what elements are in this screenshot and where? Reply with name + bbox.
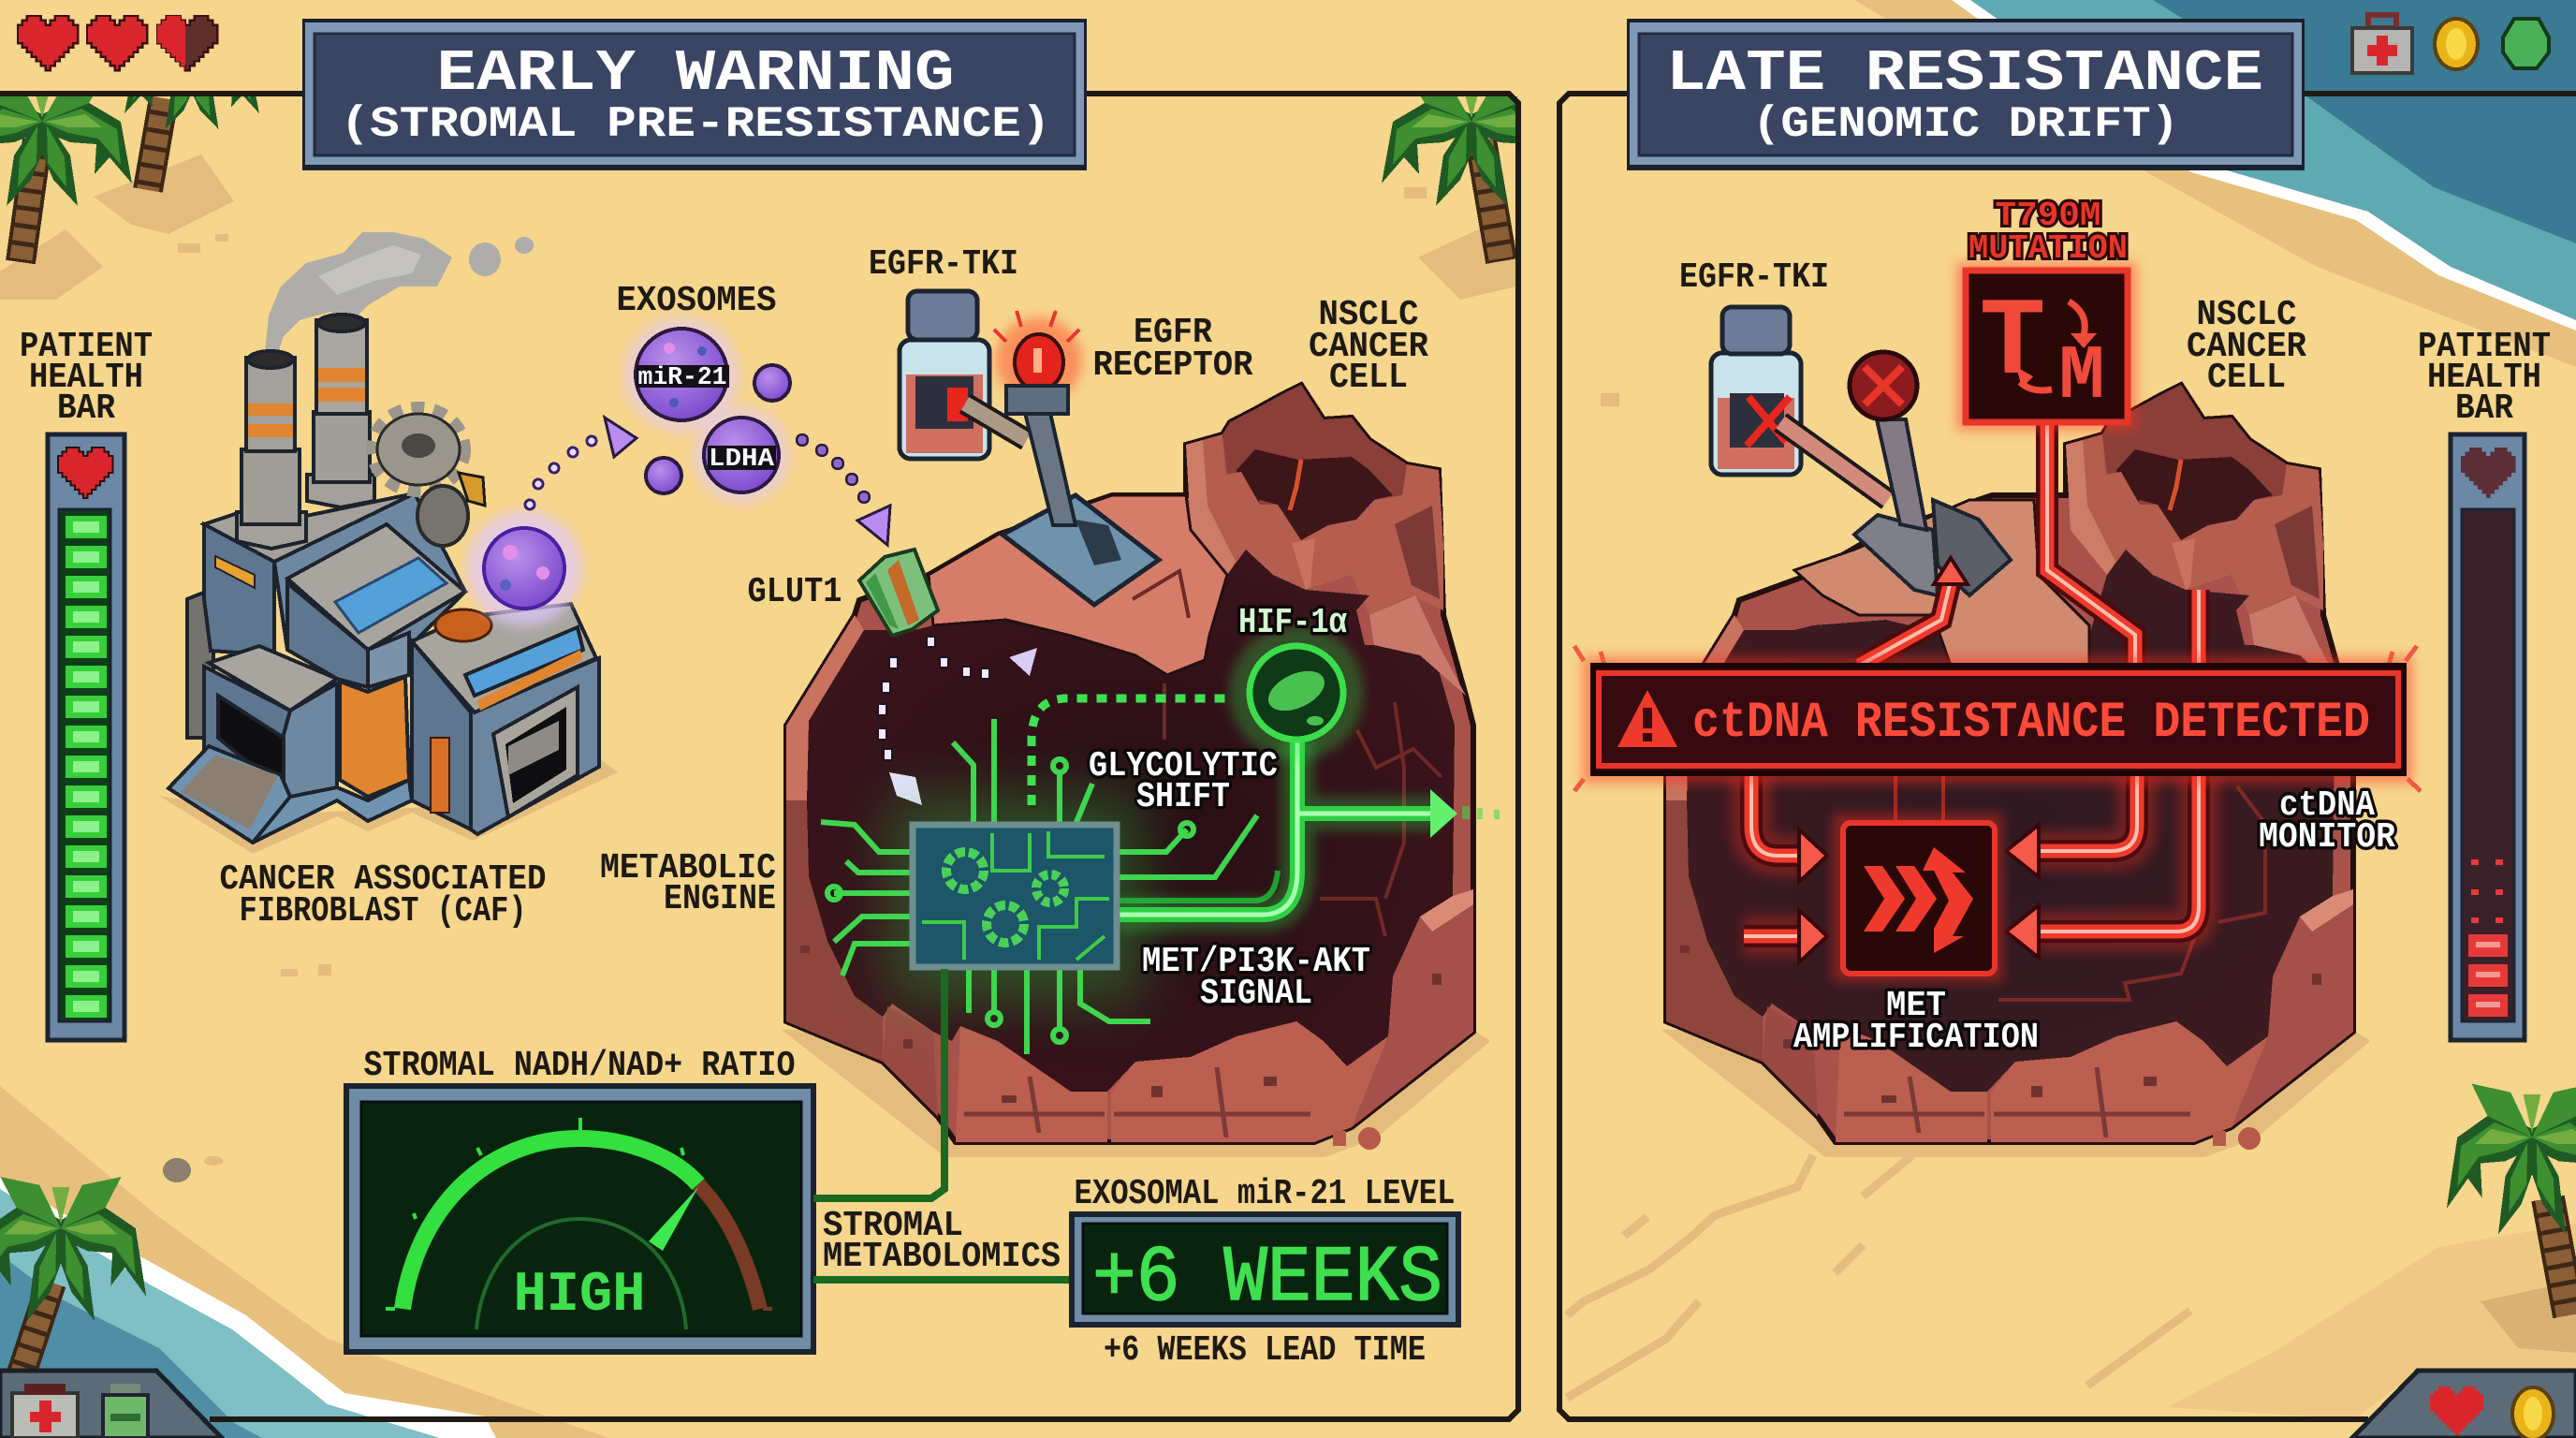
- label: egfr receptor: EGFR: [1134, 313, 1212, 353]
- label: patient health bar left: HEALTH: [29, 358, 143, 398]
- lower front wall: [262, 683, 337, 813]
- rear pipe: [187, 590, 239, 738]
- subheading: (GENOMIC DRIFT): [1752, 100, 2179, 149]
- lower left roof: [209, 646, 337, 711]
- cell interior: [807, 550, 1455, 1092]
- label: stromal metabolomics: STROMAL: [823, 1206, 963, 1246]
- label: ctdna monitor: MONITOR: [2259, 817, 2395, 858]
- label: gauge title: STROMAL NADH/NAD+ RATIO: [363, 1046, 796, 1086]
- banner: ctdna resistance detected: [1574, 646, 2421, 791]
- vent: [215, 556, 255, 588]
- label: ctdna monitor: [2259, 785, 2395, 858]
- label: t790m mutation: T790M: [1996, 197, 2100, 235]
- main roof: [204, 493, 426, 562]
- icon: warning triangle: [1617, 690, 1677, 747]
- orange stripe: [477, 650, 582, 711]
- lever handle: [965, 404, 1027, 440]
- label: met/pi3k-akt signal: [1142, 942, 1370, 1014]
- icon: battery: [103, 1384, 148, 1438]
- label: exosomes: EXOSOMES: [616, 281, 777, 321]
- label: met/pi3k-akt signal: SIGNAL: [1200, 974, 1312, 1014]
- label: nsclc left: CELL: [1329, 358, 1408, 398]
- rock front: [786, 595, 1473, 1142]
- receptor beacon: [994, 311, 1082, 414]
- exosome: LDHA: [704, 418, 779, 492]
- hif-1a node: [1229, 625, 1364, 760]
- palm: top-left pair: [0, 96, 259, 300]
- top slab: [929, 495, 1227, 675]
- red signal lines: [1744, 425, 2199, 936]
- hud: lives hearts: [18, 16, 217, 70]
- right block right wall: [471, 658, 599, 834]
- icon: heart: [2430, 1387, 2483, 1435]
- connector lines: stromal metabolomics: [813, 969, 1072, 1280]
- label: nsclc right: [2187, 295, 2306, 398]
- label: t790m mutation: [1969, 197, 2128, 268]
- gear small: [417, 473, 485, 546]
- label: egfr-tki left: EGFR-TKI: [869, 244, 1018, 285]
- label: met amplification: [1793, 986, 2039, 1058]
- middle right wall: [368, 633, 409, 687]
- lever shaft: [1025, 413, 1076, 525]
- label: nsclc left: [1309, 295, 1428, 398]
- label: nsclc right: CELL: [2207, 358, 2286, 398]
- door frame: [493, 687, 578, 817]
- label: egfr-tki right: EGFR-TKI: [1679, 257, 1829, 298]
- drug bottle: [1711, 307, 1801, 475]
- nsclc cancer cell: right: [1661, 385, 2370, 1157]
- exosome cluster: [623, 316, 790, 504]
- background: top-right sea: [1854, 0, 2576, 367]
- background: sand dunes: [1567, 1155, 2576, 1419]
- base: [253, 780, 412, 843]
- middle left wall: [287, 583, 368, 687]
- icon: coin: [2512, 1387, 2554, 1438]
- door opening: [218, 696, 284, 792]
- smoke: [265, 232, 534, 353]
- label: stromal metabolomics: METABOLOMICS: [823, 1237, 1061, 1277]
- upper front wall: [274, 493, 465, 687]
- label: egfr receptor: [1093, 313, 1253, 386]
- chip: metabolic engine: [913, 825, 1117, 967]
- circuit traces: [821, 719, 1257, 1054]
- label: exosomal mir-21 level: EXOSOMAL miR-21 LEVEL: [1075, 1174, 1455, 1214]
- icon: medkit: [12, 1384, 78, 1438]
- lever base front: [1854, 515, 1938, 595]
- label: glycolytic shift: GLYCOLYTIC: [1089, 746, 1278, 786]
- orange bin: [435, 609, 491, 641]
- label: stromal metabolomics: [823, 1206, 1061, 1277]
- label: glut1: GLUT1: [747, 572, 842, 612]
- label: nsclc left: NSCLC: [1318, 295, 1419, 335]
- label: egfr receptor: RECEPTOR: [1093, 345, 1253, 386]
- cell interior: [1687, 550, 2334, 1092]
- label: met/pi3k-akt signal: MET/PI3K-AKT: [1142, 942, 1370, 982]
- gauge: stromal nadh/nad+ ratio: [346, 1086, 813, 1352]
- palm: top-centre: [1382, 96, 1517, 300]
- glut1 transporter: [859, 550, 938, 636]
- solar panel: [335, 558, 446, 633]
- background: bottom-left sea: [0, 1086, 608, 1438]
- lever: egfr-tki left: [900, 291, 1159, 605]
- lever base rear: [1933, 500, 2011, 595]
- dotted line to hif-1a: [1032, 698, 1232, 805]
- exosome: miR-21: miR-21: [638, 364, 726, 392]
- rock front: [1666, 595, 2353, 1142]
- ramp: [168, 746, 290, 843]
- icon: gem: [2503, 19, 2549, 68]
- arrow: exosomes to cell: [797, 434, 890, 545]
- label: cancer associated fibroblast: [219, 859, 547, 932]
- lower left wall: [204, 667, 290, 826]
- gauge value: HIGH: [513, 1264, 646, 1328]
- top slab: [1794, 500, 2089, 666]
- label: patient health bar right: BAR: [2455, 389, 2513, 429]
- blue stripe: [465, 627, 583, 696]
- label: nsclc right: CANCER: [2187, 327, 2306, 367]
- icon: coin: [2435, 19, 2478, 69]
- label: nsclc left: CANCER: [1309, 327, 1428, 367]
- panel: late resistance border: [1559, 94, 2576, 1419]
- heading: EARLY WARNING: [436, 40, 955, 107]
- label: patient health bar left: BAR: [57, 389, 115, 429]
- chimney 1: [237, 351, 306, 549]
- arrow: factory to exosomes: [525, 418, 637, 509]
- t790m mutation sign: M: [2058, 333, 2105, 420]
- lever base: [1003, 495, 1159, 605]
- label: cancer associated fibroblast: CANCER ASSOCIATED: [219, 859, 547, 900]
- label: cancer associated fibroblast: FIBROBLAST (CAF): [240, 891, 526, 932]
- door inner: [505, 707, 566, 803]
- icon: medkit: [2352, 15, 2412, 73]
- hud: bottom-right tray: [2352, 1371, 2576, 1438]
- cracks: [1133, 571, 1442, 936]
- right block roof: [412, 604, 596, 712]
- label: glycolytic shift: [1089, 746, 1278, 817]
- label: t790m mutation: MUTATION: [1969, 229, 2128, 268]
- blocked receptor: [1850, 352, 1917, 419]
- label: lead time: +6 WEEKS LEAD TIME: [1104, 1330, 1426, 1371]
- exosome: miR-21: [636, 329, 729, 420]
- panel: early warning border: [0, 94, 1518, 1419]
- label: met amplification: MET: [1886, 986, 1946, 1026]
- right block left wall: [412, 641, 471, 829]
- header: early warning: [302, 19, 1087, 170]
- patient health bar: left full: [48, 434, 124, 1040]
- rock bits: [2213, 1127, 2261, 1150]
- label: patient health bar left: [20, 327, 153, 429]
- middle roof: [287, 524, 465, 650]
- label: patient health bar right: [2418, 327, 2551, 429]
- subheading: (STROMAL PRE-RESISTANCE): [341, 100, 1050, 149]
- met amplification core: [1833, 814, 2003, 982]
- label: metabolic engine: [600, 848, 776, 919]
- header: late resistance: [1627, 19, 2305, 170]
- building shadow: [159, 758, 618, 854]
- rock bits: [1333, 1127, 1381, 1150]
- palm: bottom-right: [2447, 1084, 2576, 1315]
- label: nsclc right: NSCLC: [2196, 295, 2297, 335]
- arrowheads into met amplification: [1799, 558, 2039, 962]
- t790m mutation sign: T: [1980, 282, 2045, 406]
- green glow around metabolic engine: [889, 796, 1142, 1002]
- readout: +6 weeks: +6 WEEKS: [1092, 1235, 1442, 1324]
- label: glycolytic shift: SHIFT: [1136, 777, 1230, 817]
- orange column: [340, 677, 409, 797]
- chimney 2: [307, 315, 374, 507]
- label: hif-1a: HIF-1α: [1238, 603, 1347, 643]
- nsclc cancer cell: left: [782, 385, 1490, 1157]
- lever handle: [1780, 422, 1888, 500]
- label: patient health bar right: PATIENT: [2418, 327, 2551, 367]
- exosome: LDHA: LDHA: [709, 446, 775, 474]
- arrows: white dotted into cell: [878, 637, 1037, 805]
- label: patient health bar right: HEALTH: [2427, 358, 2541, 398]
- exosome leaving factory: [466, 510, 582, 626]
- drug bottle: [900, 291, 989, 459]
- lever: egfr-tki right (blocked): [1711, 307, 2011, 595]
- signal line: met/pi3k-akt: [1119, 740, 1500, 915]
- factory: cancer associated fibroblast: [159, 232, 618, 854]
- heading: LATE RESISTANCE: [1666, 40, 2263, 107]
- patient health bar: right depleted: [2451, 434, 2525, 1040]
- t790m mutation sign: [1956, 262, 2137, 431]
- label: patient health bar left: PATIENT: [20, 327, 153, 367]
- banner text: ctDNA RESISTANCE DETECTED: [1692, 695, 2370, 752]
- pebble on sand: [163, 187, 1619, 1182]
- palm: bottom-left: [0, 1177, 146, 1376]
- gear large: [372, 407, 465, 492]
- label: ctdna monitor: ctDNA: [2279, 785, 2375, 826]
- label: metabolic engine: ENGINE: [664, 879, 776, 919]
- cracks: [1998, 786, 2265, 1000]
- hud: bottom-left tray: [0, 1371, 222, 1438]
- orange pipe: [431, 738, 449, 813]
- hud: top-right items: [2352, 15, 2549, 73]
- label: metabolic engine: METABOLIC: [600, 848, 776, 888]
- upper left wall: [204, 524, 274, 655]
- lever shaft: [1877, 419, 1926, 530]
- label: met amplification: AMPLIFICATION: [1793, 1018, 2039, 1058]
